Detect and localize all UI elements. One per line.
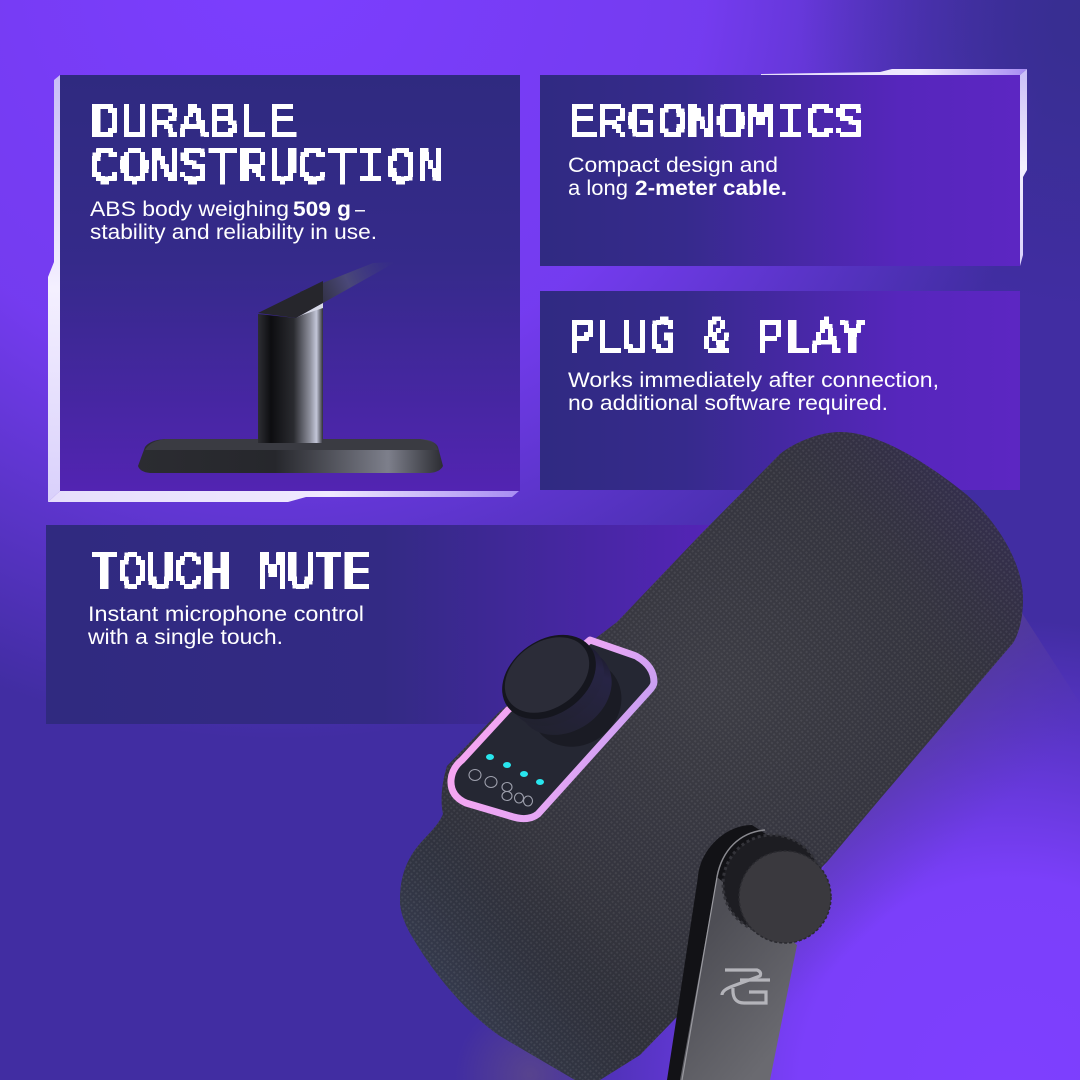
body text: touch mute: with a single touch. xyxy=(87,626,283,649)
image: microphone stand xyxy=(138,262,443,473)
panel: plug and play xyxy=(540,291,1020,490)
body text: ergonomics: Compact design and xyxy=(568,154,778,177)
mode icons xyxy=(469,770,532,806)
logo on arm xyxy=(722,970,770,1003)
body text: durable construction: stability and reliability in use. xyxy=(90,221,377,244)
stand arm and mount xyxy=(667,825,831,1080)
body text: ergonomics: a long xyxy=(568,177,628,200)
panel: ergonomics xyxy=(540,69,1027,266)
volume knob xyxy=(486,617,639,764)
body text: touch mute: Instant microphone control xyxy=(88,603,364,626)
microphone shadow haze xyxy=(455,610,1080,1080)
body text: plug and play: no additional software required. xyxy=(568,392,888,415)
heading: ergonomics: ERGONOMICS xyxy=(568,96,864,153)
body text: durable construction xyxy=(90,198,377,244)
heading: durable construction xyxy=(90,96,446,198)
heading: plug and play: PLUG & PLAY xyxy=(568,311,866,368)
body text: durable construction: 509 g xyxy=(293,198,351,221)
heading: durable construction: CONSTRUCTION xyxy=(90,141,446,198)
panel: durable construction xyxy=(48,75,520,502)
body text: durable construction: ABS body weighing xyxy=(90,198,289,221)
control plate with glowing ring xyxy=(451,617,654,819)
knurled tightening knob xyxy=(723,835,831,943)
heading: touch mute: TOUCH MUTE xyxy=(90,546,371,603)
body text: ergonomics xyxy=(568,154,787,200)
body text: plug and play xyxy=(568,369,939,415)
panel: touch mute xyxy=(46,525,720,724)
heading: durable construction: DURABLE xyxy=(90,96,297,153)
body text: durable construction: – xyxy=(355,198,365,221)
body text: ergonomics: 2-meter cable. xyxy=(635,177,787,200)
microphone body xyxy=(400,432,1023,1080)
body text: touch mute xyxy=(87,603,364,649)
body text: plug and play: Works immediately after connection, xyxy=(568,369,939,392)
status LEDs xyxy=(486,754,544,785)
